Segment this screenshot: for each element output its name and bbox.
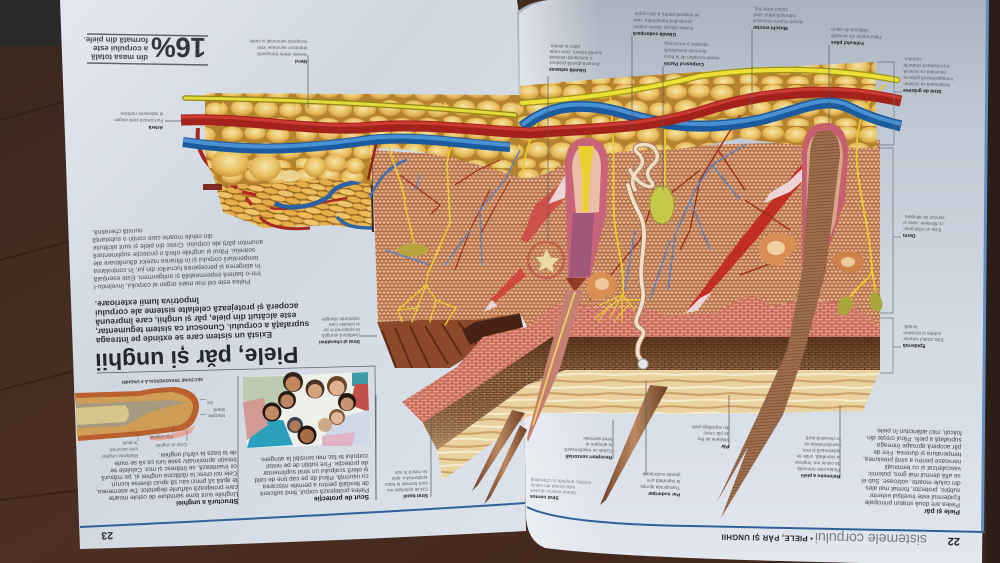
big hair follicle and shaft [717, 123, 848, 518]
label: pacinian corpuscle: dermului detectează [664, 48, 707, 54]
nail labels: Corp al unghiei [155, 442, 187, 448]
label: sensory receptors: Celule ce reacționează [564, 447, 612, 453]
text: protective shield [253, 452, 369, 502]
label: artery: și substanțe nutritive [120, 111, 163, 117]
label: erector muscle: corpul simte frig. [753, 6, 788, 12]
label: sensory receptors: Receptori senzoriali [565, 453, 612, 460]
nail labels [101, 399, 225, 459]
label: pacinian corpuscle: vibrațiile și presiunea [664, 41, 708, 47]
left hair follicle and shaft [527, 138, 608, 442]
nail labels: Pat unghial [150, 434, 173, 440]
label: sweat pore [640, 472, 681, 497]
label: horny layer: Stratul exterior al pielii [530, 488, 576, 495]
label: fat layer [903, 57, 955, 94]
nail labels: este ascunsă [110, 447, 138, 453]
text: skin and hair: subțire, protector, format mai ales [865, 484, 960, 494]
text: nail structure: te ajută să prinzi sau să apuci diverse lucruri. [110, 476, 238, 488]
nail cross-section diagram [75, 387, 199, 441]
label: skin renewal: transformându-se [804, 442, 841, 448]
body text: numită cheratină. [92, 227, 143, 235]
body text: anumitor părți ale corpului. Cresc din piele și sunt alcătuite [92, 238, 263, 251]
label: epidermis: la apă. [903, 324, 918, 330]
brown layer [423, 337, 880, 450]
text: protective shield: corpului te fac mai sensibil la atingere. [259, 452, 368, 463]
label: sweat gland: producând transpirația, care [633, 18, 692, 24]
fat layer right [520, 62, 877, 178]
label: basal layer: Strat bazal [403, 492, 428, 499]
label: sweat gland: Glandă sudoripară [633, 30, 676, 37]
label: skin renewal: la suprafață, unde se [796, 454, 841, 460]
label: pacinian corpuscle: Corpuscul Pacini [663, 60, 704, 67]
intro text: Există un sistem care se extinde pe întreaga [96, 330, 272, 346]
label: artery: Furnizează pielii oxigen [114, 118, 163, 123]
arrector muscle right [685, 162, 806, 313]
label: dermis [902, 214, 945, 239]
label: dermis: senzori de atingere. [903, 214, 945, 220]
title: Piele, păr și unghii [95, 341, 299, 375]
label: skin renewal: Pielea este reînnoită [797, 466, 840, 472]
intro text: împotriva lumii exterioare. [95, 296, 200, 309]
text: skin and hair: Piele și păr [924, 507, 960, 515]
main vein [183, 101, 901, 149]
sweat gland coil and duct [628, 145, 657, 362]
label: dermis: cu fibroase, vase și [903, 220, 943, 226]
running head: section: sistemele corpului [815, 530, 927, 548]
sensory nerves [387, 85, 885, 325]
text: protective shield: de flexibilă pentru a permite mișcarea [262, 479, 369, 490]
label: sweat gland [633, 11, 699, 38]
text: nail structure: Structură a unghiei [176, 497, 238, 506]
page number: 22 [948, 535, 960, 547]
label: sweat gland: se evaporă pentru a răci corpul. [633, 11, 699, 18]
text: protective shield: și oferă scalpului un strat suplimentar [262, 466, 368, 476]
pink epidermis band [402, 293, 880, 423]
running head: chapter: • PIELE, PĂR ȘI UNGHII [721, 532, 813, 543]
label: fat layer: necesară ca rezervă [903, 69, 946, 75]
label: sweat gland: Aceste glande răcesc corpul, [633, 24, 693, 31]
label: erector muscle: Mușchi erector [753, 24, 788, 31]
label: hair: de păr cresc [703, 431, 729, 436]
hair 3 short [600, 385, 668, 505]
page rule [80, 503, 525, 527]
nail labels: în piele [122, 440, 139, 446]
beige layer [437, 370, 880, 480]
fat layer left [205, 93, 520, 186]
label: epidermis [902, 324, 944, 349]
label: sebaceous gland [549, 44, 603, 73]
left extra hairs [472, 410, 525, 491]
text: skin and hair: vascularizat și cu terminații [884, 463, 961, 472]
main nerve [185, 70, 897, 115]
text: skin and hair: păr acoperă aproape întreaga [876, 441, 962, 450]
label: sweat pore: Transpirația ajunge [640, 484, 680, 490]
label: dermis: Derm [902, 232, 916, 238]
label: keratin layer: și celulele care [328, 322, 360, 327]
star receptor [528, 242, 564, 278]
stat caption: formată din piele. [84, 35, 148, 45]
label: sebaceous gland: numită sebum, care unge [549, 49, 602, 56]
label: sensory receptors [564, 436, 613, 460]
label: hair follicle [831, 27, 882, 46]
text: nail structure: de la baza la vârful unghiei. [159, 449, 237, 458]
pacinian corpuscles [650, 186, 674, 224]
nail labels: liberă [213, 407, 225, 412]
label: dermis: Este un strat gros, [903, 226, 941, 232]
page rule [527, 507, 985, 532]
label: basal layer [384, 469, 428, 499]
panel: box with photo and nail [75, 366, 376, 506]
dark vertical cut edge [371, 150, 373, 232]
text: skin and hair: foliculi, mici adâncituri în piele. [875, 427, 962, 436]
label: sensory receptors: la atingere și [586, 442, 612, 448]
label: keratin layer: în epidermă în jur [323, 327, 361, 333]
label: sweat pore: glanda sudoripară [642, 472, 681, 478]
label: basal layer: epidermului, apoi [392, 475, 428, 481]
stat caption: din masa totală [91, 52, 148, 62]
photo: group of friends [243, 372, 369, 448]
text: skin and hair: Epidermul este învelișul exterior [869, 491, 960, 501]
label: skin renewal: Reînnoire a pielii [800, 472, 840, 479]
label: sweat pore: Por sudoripar [648, 490, 680, 497]
label: keratin layer: Umflătură alungită [321, 333, 360, 338]
nail labels: Os [206, 400, 213, 405]
label: nerves: Nervi [294, 58, 307, 64]
label: sebaceous gland: Glandă sebacee [549, 66, 586, 73]
label: hair follicle: Foliculul pilos [831, 39, 864, 46]
body text: într-o barieră impermeabilă și antigermeni. Este esențială [93, 269, 262, 282]
label: keratin layer: substanțe alungite [321, 316, 360, 322]
label: erector muscle [753, 6, 803, 31]
text: nail structure [95, 449, 239, 506]
panel: diagram labels and leader lines [114, 6, 955, 502]
arrector muscle left [521, 180, 566, 242]
label: sebaceous gland: părul și pielea. [550, 44, 580, 49]
main artery [181, 89, 901, 133]
label: keratin layer: Strat al cheratinei [318, 338, 360, 345]
label: sebaceous gland: o substanță uleioasă [549, 55, 592, 61]
text: skin and hair: Pielea are două straturi principale. [863, 498, 960, 508]
label: pacinian corpuscle [663, 41, 720, 67]
label: hair: din suprafața pielii [692, 424, 730, 430]
label: nerves: receptorii senzoriali și creier [249, 39, 307, 44]
diagram: skin cross-section [181, 62, 901, 518]
label: fat layer: Acționează ca izolator, [903, 81, 950, 88]
lower left fat lobe [205, 150, 372, 230]
panel: right page 22 [517, 0, 989, 563]
thin arteries and veins [368, 115, 790, 300]
panel: left page 23 [60, 0, 526, 549]
label: hair: Milioane de fire [697, 437, 729, 442]
text: protective shield: Pielea protejează corpul, fiind suficient [260, 486, 369, 497]
label: pacinian corpuscle: Acești receptori de la baza [664, 54, 719, 61]
label: basal layer: Celule epiteliale noi [387, 487, 428, 493]
large pale fat cells [211, 149, 364, 182]
label: hair [691, 424, 730, 449]
intro text: este alcătuit din piele, păr și unghii, care împreună [95, 311, 297, 328]
body text: din celule moarte care conțin o substanță [92, 232, 213, 243]
label: hair follicle: Părul crește din această [831, 33, 881, 40]
text: skin and hair [861, 426, 962, 515]
label: epidermis: Este stratul exterior [903, 336, 944, 342]
label: sensory receptors: trimit semnale [583, 436, 613, 442]
text: protective shield: Scut de protecție [314, 493, 369, 502]
label: horny layer [529, 477, 592, 502]
label: fat layer: și protejează straturile [903, 63, 950, 69]
text: skin and hair: suprafață a pielii. Părul crește din [867, 434, 962, 443]
label: erector muscle: îndreaptă părul când [753, 12, 797, 19]
label: basal layer: se mișcă în sus [394, 469, 427, 475]
leader lines [165, 30, 902, 500]
label: epidermis: subțire și rezistent [903, 330, 941, 336]
text: skin and hair: nervoase pentru a simți presiunea, [863, 455, 961, 465]
scaly dark layer under left dermis [377, 313, 523, 368]
label: keratin layer [318, 316, 361, 345]
big number: 16% [151, 32, 206, 63]
label: skin renewal [794, 435, 842, 479]
body text: în atingerea și perceperea lucrurilor din jur, în controlarea [93, 262, 262, 274]
nail labels: Rădăcina unghiei [102, 453, 138, 459]
label: fat layer: Strat de grăsime [903, 87, 941, 94]
sebaceous glands [586, 233, 864, 300]
text: protective shield: de protecție. Fire subțiri de pe restul [266, 459, 368, 469]
text: skin and hair: din celule moarte, solzoase. Sub el [861, 477, 961, 486]
label: horny layer: Strat cornos [530, 493, 559, 501]
label: hair: Păr [721, 443, 729, 449]
label: epidermis: Epidermă [903, 342, 925, 349]
panel: stat 16% [83, 32, 208, 65]
label: nerves: impulsuri nervoase între [257, 45, 307, 51]
label: hair follicle: rădăcină din derm [831, 27, 869, 33]
intro text: acoperă și protejează celelalte sisteme ale corpului [95, 301, 299, 318]
text: nail structure: Cele noi cresc la rădăcina unghiei și, pe măsură [101, 469, 237, 481]
label: skin renewal: aplatizează și mor, [802, 448, 841, 454]
text: nail structure: Unghiile sunt lame semidure de celule moarte [108, 490, 238, 502]
label: horny layer: moarte, umplute cu cheratină [530, 477, 592, 485]
label: artery: Arteră [148, 124, 163, 130]
stat caption: a corpului este [92, 44, 148, 53]
label: nerves [248, 39, 307, 64]
nail labels: Margine [208, 413, 225, 419]
nail section caption: SECȚIUNE TRANSVERSALĂ A UNGHIEI [122, 377, 203, 385]
label: sweat pore: la suprafață prin [646, 478, 680, 484]
text: skin and hair: temperatura și durerea. Fire de [873, 448, 961, 458]
label: artery [114, 111, 163, 130]
body text: temperaturii corpului și în filtrarea razelor dăunătoare ale [93, 254, 259, 267]
dermis [372, 140, 880, 330]
body text: Pielea este cel mai mare organ al corpului, învelindu-l [93, 278, 251, 290]
label: skin renewal: de celule noi, împinse [795, 460, 840, 466]
intro text: suprafață a corpului. Cunoscut ca sistem tegumentar, [96, 319, 309, 337]
text: nail structure: întrețin aproximativ șase luni ca să se mute [114, 455, 238, 467]
label: horny layer: este format din celule [530, 483, 575, 490]
label: basal layer: sunt formate la baza [385, 481, 428, 487]
body text: soarelui. Părul și unghiile oferă o protecție suplimentară [93, 246, 255, 259]
text: nail structure: care protejează vârfurile degetelor. De asemenea, [96, 483, 238, 495]
label: sebaceous gland: Această glandă produce [549, 60, 600, 67]
label: nerves: Aceste rețele transportă [257, 52, 307, 57]
page number: 23 [101, 529, 113, 541]
label: fat layer: corpului. [904, 57, 922, 62]
label: skin renewal: în cheratină dură [805, 435, 842, 441]
text: protective shield: cu ușurință. Părul de pe cap ține de cald [254, 472, 369, 483]
lower left fat vessels [198, 128, 372, 229]
label: erector muscle: Acești mușchi minusculi [753, 18, 803, 25]
text: nail structure: ce înaintează, se întăresc și mor. Celulele se [110, 462, 237, 474]
text: skin and hair: se află dermul mai gros, puternic [867, 470, 961, 479]
label: fat layer: înmagazinează grăsime [903, 75, 954, 82]
